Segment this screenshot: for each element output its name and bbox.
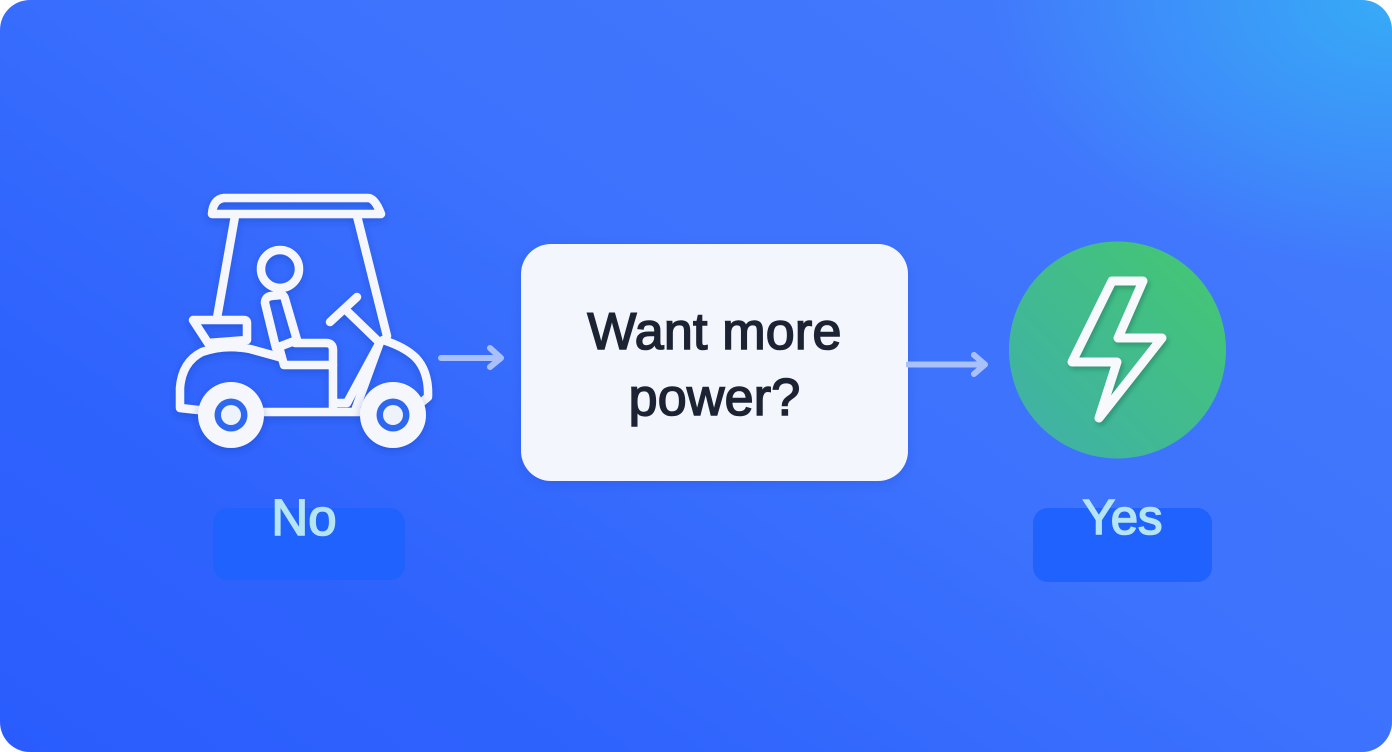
icon: lightning circle — [1009, 242, 1226, 458]
arrow: question to lightning — [906, 352, 988, 377]
question text: Want more — [587, 303, 842, 361]
question text — [586, 303, 842, 427]
question box — [521, 244, 908, 481]
label: No: No — [271, 489, 337, 546]
icon: golf cart — [174, 194, 434, 453]
question text: power? — [629, 369, 800, 427]
icon: lightning bolt — [1072, 281, 1162, 418]
label background: No — [213, 508, 405, 580]
arrow: cart to question — [438, 345, 504, 370]
label background: Yes — [1033, 508, 1212, 582]
label: Yes: Yes — [1083, 491, 1162, 545]
golf cart group: No branch — [174, 194, 434, 453]
